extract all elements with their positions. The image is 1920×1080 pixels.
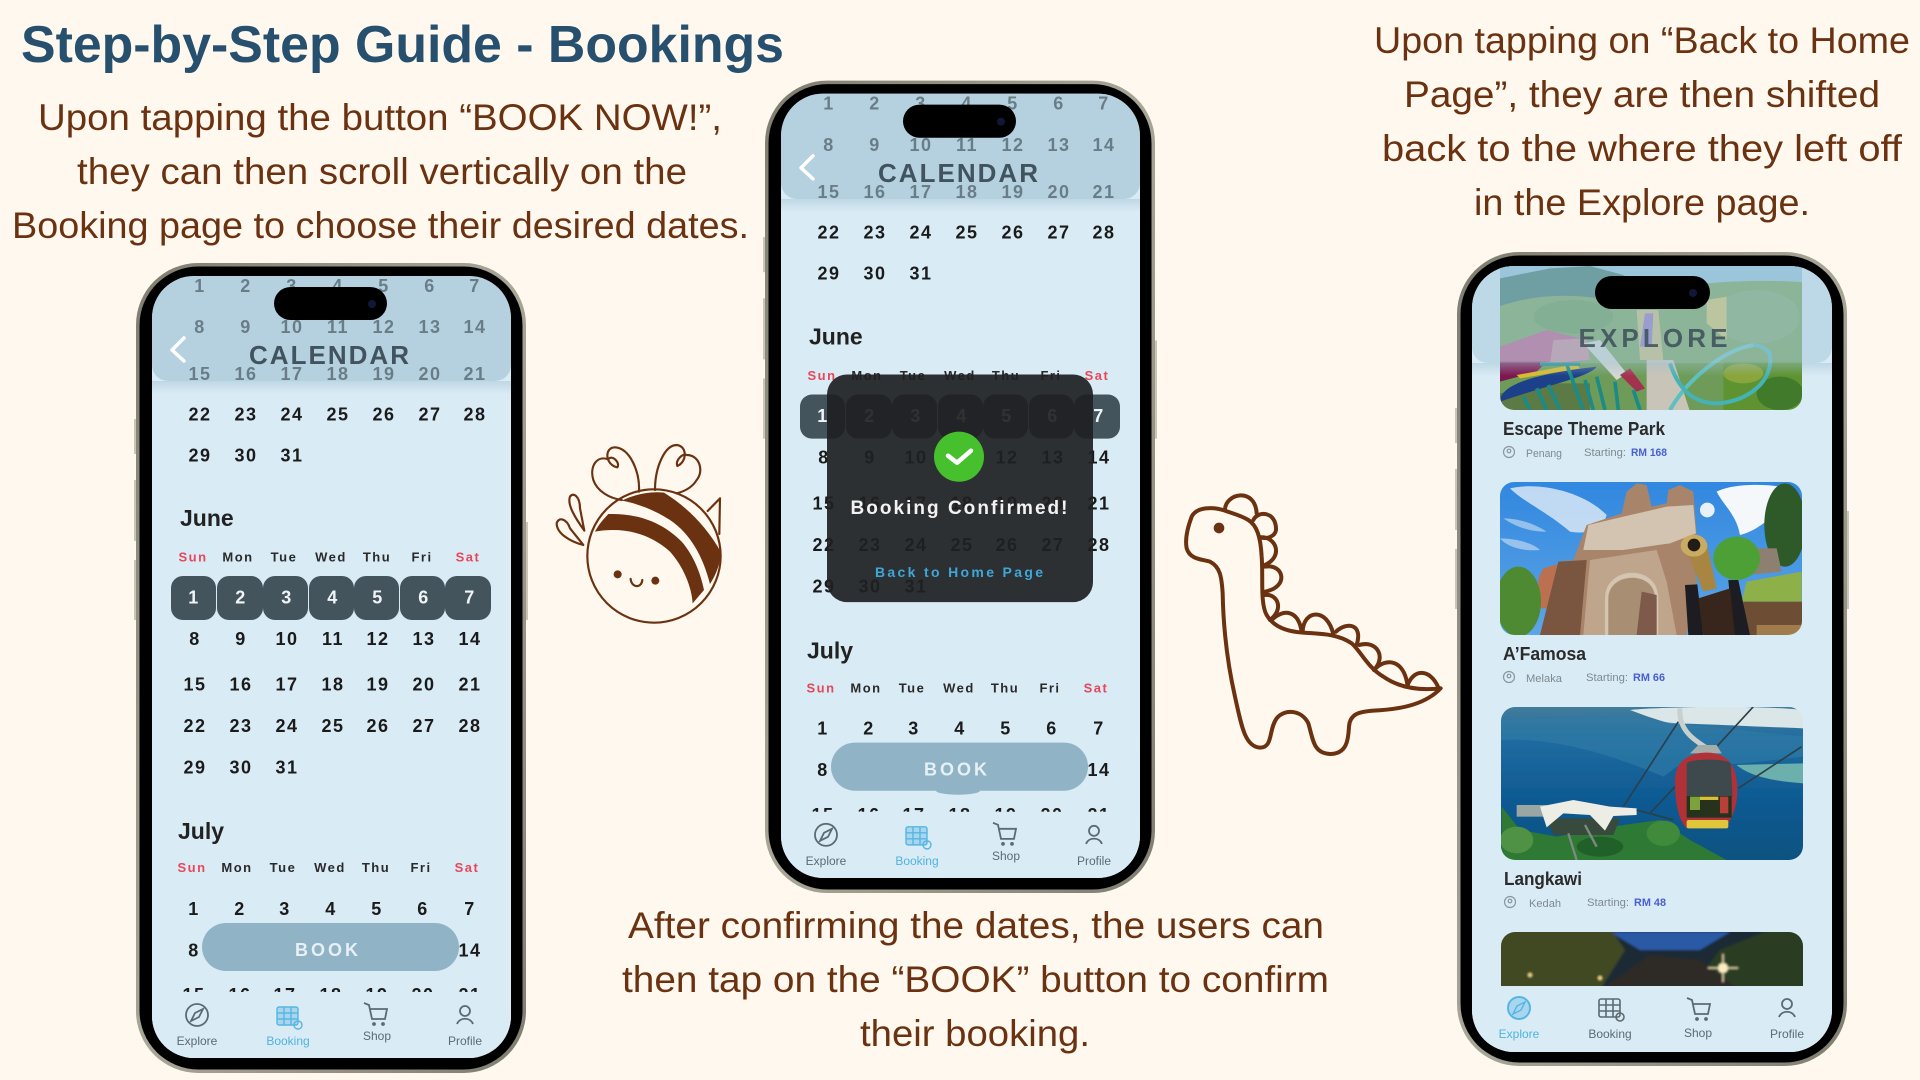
bottom navigation bbox=[152, 992, 511, 1058]
June calendar: 12 bbox=[366, 629, 390, 649]
May dates: 14 bbox=[1092, 135, 1116, 155]
May dates: 22 bbox=[817, 223, 841, 243]
June calendar: June bbox=[809, 323, 863, 349]
May dates: 18 bbox=[955, 182, 979, 202]
May dates: 6 bbox=[1053, 94, 1065, 114]
text block: step two bbox=[622, 905, 1329, 1054]
June calendar: 26 bbox=[995, 535, 1019, 555]
May dates: 23 bbox=[234, 404, 258, 424]
July calendar: Tue bbox=[899, 680, 925, 695]
icon: booking bbox=[277, 1007, 302, 1029]
June calendar: 23 bbox=[858, 535, 882, 555]
June calendar: 6 bbox=[1047, 406, 1059, 426]
June calendar: June bbox=[180, 505, 234, 531]
June calendar: 27 bbox=[412, 716, 436, 736]
May dates: 16 bbox=[863, 182, 887, 202]
icon: explore bbox=[186, 1004, 208, 1026]
June calendar: 2 bbox=[864, 406, 876, 426]
June calendar: 12 bbox=[995, 448, 1019, 468]
July calendar: 20 bbox=[1040, 805, 1064, 825]
June calendar: 23 bbox=[229, 716, 253, 736]
place: Langkawi bbox=[1504, 869, 1666, 910]
icon: pin bbox=[1504, 896, 1516, 908]
May dates: 30 bbox=[234, 446, 258, 466]
icon: green check bbox=[934, 432, 984, 482]
July calendar: Fri bbox=[410, 860, 432, 875]
June calendar: 9 bbox=[235, 629, 247, 649]
June calendar: Fri bbox=[411, 550, 433, 564]
icon: explore bbox=[815, 824, 837, 846]
July calendar: 14 bbox=[1087, 760, 1111, 780]
confirmation popup: Booking Confirmed! bbox=[850, 498, 1068, 519]
icon: shop bbox=[364, 1003, 387, 1025]
July calendar: 10 bbox=[273, 940, 297, 960]
June calendar: Thu bbox=[992, 368, 1020, 383]
July calendar: 9 bbox=[234, 940, 246, 960]
July calendar: Thu bbox=[991, 680, 1019, 695]
July calendar: 18 bbox=[948, 805, 972, 825]
place: Escape Theme Park: Penang bbox=[1526, 448, 1562, 460]
header bar bbox=[781, 88, 1140, 212]
May dates: 28 bbox=[463, 404, 487, 424]
June calendar: 6 bbox=[418, 588, 430, 608]
June calendar: 3 bbox=[281, 588, 293, 608]
July calendar: July bbox=[807, 637, 853, 663]
June calendar: Fri bbox=[1040, 368, 1062, 383]
June calendar: 14 bbox=[458, 629, 482, 649]
June calendar: Sat bbox=[456, 550, 480, 564]
May dates: 3 bbox=[915, 94, 927, 114]
June calendar: 17 bbox=[904, 493, 928, 513]
June calendar: Sat bbox=[1085, 368, 1109, 383]
July calendar: Fri bbox=[1039, 680, 1061, 695]
July calendar: 15 bbox=[811, 805, 835, 825]
June calendar: 11 bbox=[951, 448, 973, 468]
dynamic island bbox=[903, 105, 1016, 138]
May dates bbox=[817, 94, 1116, 284]
May dates: 20 bbox=[418, 364, 442, 384]
May dates: 12 bbox=[1001, 135, 1025, 155]
May dates: 11 bbox=[327, 317, 349, 337]
bottom navigation: Profile bbox=[1077, 854, 1111, 868]
place: Langkawi: Kedah bbox=[1529, 898, 1561, 910]
June calendar: 25 bbox=[321, 716, 345, 736]
text block: step three: Upon tapping on “Back to Home bbox=[1374, 20, 1910, 61]
May dates: 24 bbox=[909, 223, 933, 243]
July calendar: 3 bbox=[908, 719, 920, 739]
June calendar: 19 bbox=[995, 493, 1019, 513]
bottom navigation: Profile bbox=[448, 1034, 482, 1048]
phone frame bbox=[134, 263, 528, 1073]
May dates: 29 bbox=[817, 264, 841, 284]
June calendar: 21 bbox=[458, 674, 482, 694]
icon: booking bbox=[906, 827, 931, 849]
June calendar: 20 bbox=[412, 674, 436, 694]
bottom navigation: Shop bbox=[992, 849, 1020, 863]
July calendar: 4 bbox=[954, 719, 966, 739]
June calendar: 29 bbox=[183, 758, 207, 778]
June calendar: 20 bbox=[1041, 493, 1065, 513]
place: A'Famosa: A’Famosa bbox=[1503, 644, 1587, 664]
July calendar: 1 bbox=[188, 899, 200, 919]
July calendar: 6 bbox=[1046, 719, 1058, 739]
June calendar: 29 bbox=[812, 577, 836, 597]
place: Langkawi: Langkawi bbox=[1504, 869, 1582, 889]
May dates: 16 bbox=[234, 364, 258, 384]
bottom navigation: Profile bbox=[1770, 1027, 1804, 1041]
photo: A'Famosa bbox=[1500, 482, 1802, 635]
June calendar: 25 bbox=[950, 535, 974, 555]
June calendar: 24 bbox=[904, 535, 928, 555]
May dates: 12 bbox=[372, 317, 396, 337]
June calendar: Tue bbox=[900, 368, 926, 383]
May dates: 19 bbox=[1001, 182, 1025, 202]
July calendar: 3 bbox=[279, 899, 291, 919]
June calendar: 28 bbox=[1087, 535, 1111, 555]
May dates: 14 bbox=[463, 317, 487, 337]
July calendar: Sun bbox=[177, 860, 207, 875]
July calendar: Thu bbox=[362, 860, 390, 875]
June calendar: 1 bbox=[188, 588, 200, 608]
May dates: 31 bbox=[909, 264, 933, 284]
May dates: 21 bbox=[463, 364, 487, 384]
June calendar: 13 bbox=[412, 629, 436, 649]
confirmation popup bbox=[827, 374, 1093, 602]
June calendar: 26 bbox=[366, 716, 390, 736]
May dates: 1 bbox=[194, 276, 206, 296]
text block: step one: Booking page to choose their desired dates. bbox=[12, 205, 749, 246]
July calendar: 19 bbox=[994, 805, 1018, 825]
icon: profile bbox=[1086, 826, 1102, 844]
bottom navigation bbox=[1472, 986, 1832, 1052]
May dates: 29 bbox=[188, 446, 212, 466]
June calendar: 16 bbox=[229, 674, 253, 694]
May dates: 1 bbox=[823, 94, 835, 114]
May dates: 25 bbox=[326, 404, 350, 424]
May dates: 9 bbox=[869, 135, 881, 155]
June calendar: 15 bbox=[183, 674, 207, 694]
June calendar: 18 bbox=[950, 493, 974, 513]
May dates: 8 bbox=[194, 317, 206, 337]
May dates: 7 bbox=[1098, 94, 1110, 114]
June calendar: 24 bbox=[275, 716, 299, 736]
icon: shop bbox=[1687, 998, 1710, 1020]
July calendar: 8 bbox=[817, 760, 829, 780]
place: Escape Theme Park: RM 168 bbox=[1631, 447, 1667, 459]
May dates: 15 bbox=[817, 182, 841, 202]
June calendar: 27 bbox=[1041, 535, 1065, 555]
July calendar: July bbox=[178, 818, 224, 844]
phone frame bbox=[1455, 252, 1849, 1066]
May dates: 23 bbox=[863, 223, 887, 243]
July calendar: 16 bbox=[857, 805, 881, 825]
July calendar: Tue bbox=[270, 860, 296, 875]
phone: booking confirmed bbox=[763, 81, 1157, 893]
photo: resort at night bbox=[1501, 932, 1803, 986]
June calendar: 22 bbox=[812, 535, 836, 555]
May dates: 30 bbox=[863, 264, 887, 284]
July calendar: 18 bbox=[319, 985, 343, 1005]
header bar: CALENDAR bbox=[249, 340, 409, 370]
book button: BOOK bbox=[924, 760, 990, 780]
July calendar bbox=[806, 637, 1111, 825]
photo: Langkawi bbox=[1501, 707, 1803, 860]
May dates: 18 bbox=[326, 364, 350, 384]
June calendar: 7 bbox=[1093, 406, 1105, 426]
May dates: 10 bbox=[909, 135, 933, 155]
July calendar: Sun bbox=[806, 680, 836, 695]
July calendar: 10 bbox=[902, 760, 926, 780]
July calendar: Wed bbox=[314, 860, 346, 875]
place: Langkawi: Starting: bbox=[1587, 897, 1629, 909]
June calendar: 15 bbox=[812, 493, 836, 513]
June calendar: 16 bbox=[858, 493, 882, 513]
text block: step two: their booking. bbox=[860, 1013, 1090, 1054]
bottom navigation: Booking bbox=[266, 1034, 310, 1048]
text block: step two: After confirming the dates, the users can bbox=[628, 905, 1324, 946]
May dates: 24 bbox=[280, 404, 304, 424]
July calendar: 21 bbox=[458, 985, 482, 1005]
book button bbox=[831, 743, 1088, 795]
May dates: 5 bbox=[378, 276, 390, 296]
July calendar: 11 bbox=[320, 940, 342, 960]
June calendar: 5 bbox=[1001, 406, 1013, 426]
May dates: 27 bbox=[418, 404, 442, 424]
text block: step one: they can then scroll vertically on the bbox=[77, 151, 687, 192]
June calendar: 19 bbox=[366, 674, 390, 694]
July calendar: Wed bbox=[943, 680, 975, 695]
phone: booking calendar bbox=[134, 263, 528, 1073]
July calendar: Sat bbox=[455, 860, 479, 875]
bottom navigation: Explore bbox=[177, 1034, 218, 1048]
July calendar: Mon bbox=[850, 680, 882, 695]
July calendar: 17 bbox=[273, 985, 297, 1005]
May dates: 17 bbox=[280, 364, 304, 384]
icon: pin bbox=[1504, 446, 1514, 458]
screen content bbox=[1460, 260, 1840, 1061]
icon: pin bbox=[1504, 672, 1514, 682]
June calendar bbox=[800, 323, 1120, 597]
July calendar: 15 bbox=[182, 985, 206, 1005]
July calendar: 4 bbox=[325, 899, 337, 919]
book button bbox=[202, 923, 459, 971]
text block: step three: in the Explore page. bbox=[1474, 182, 1810, 223]
June calendar: 31 bbox=[275, 758, 299, 778]
July calendar: 7 bbox=[1093, 719, 1105, 739]
June calendar: 13 bbox=[1041, 448, 1065, 468]
May dates: 8 bbox=[823, 135, 835, 155]
June calendar: Tue bbox=[271, 550, 297, 564]
icon: explore bbox=[1508, 997, 1530, 1019]
dynamic island bbox=[1595, 276, 1710, 309]
June calendar bbox=[171, 505, 491, 778]
screen content bbox=[769, 88, 1149, 882]
May dates: 2 bbox=[869, 94, 881, 114]
June calendar: 10 bbox=[275, 629, 299, 649]
icon: dinosaur bbox=[1186, 495, 1441, 754]
header bar: EXPLORE bbox=[1578, 323, 1728, 353]
July calendar: 14 bbox=[458, 940, 482, 960]
June calendar: 5 bbox=[372, 588, 384, 608]
July calendar: 6 bbox=[417, 899, 429, 919]
text block: step one: Upon tapping the button “BOOK NOW!”, bbox=[38, 97, 722, 138]
June calendar: 18 bbox=[321, 674, 345, 694]
text block: step one bbox=[12, 97, 749, 246]
dynamic island bbox=[274, 287, 387, 320]
text block: step three bbox=[1374, 20, 1910, 223]
May dates: 25 bbox=[955, 223, 979, 243]
place: Escape Theme Park: Starting: bbox=[1584, 447, 1626, 459]
bottom navigation: Explore bbox=[806, 854, 847, 868]
June calendar: 11 bbox=[322, 629, 344, 649]
June calendar: Mon bbox=[222, 550, 254, 564]
May dates: 20 bbox=[1047, 182, 1071, 202]
text block: step three: Page”, they are then shifted bbox=[1404, 74, 1880, 115]
June calendar: 9 bbox=[864, 448, 876, 468]
July calendar: 17 bbox=[902, 805, 926, 825]
photo: Escape Theme Park bbox=[1500, 266, 1802, 410]
May dates: 6 bbox=[424, 276, 436, 296]
bottom navigation: Booking bbox=[1588, 1027, 1632, 1041]
icon: bee bbox=[557, 445, 721, 623]
place: A'Famosa bbox=[1502, 647, 1665, 684]
July calendar: 1 bbox=[817, 719, 829, 739]
July calendar: 13 bbox=[1040, 760, 1064, 780]
July calendar: 20 bbox=[411, 985, 435, 1005]
screen content bbox=[140, 270, 520, 1062]
title: Step-by-Step Guide - Bookings bbox=[21, 16, 784, 74]
July calendar: 13 bbox=[411, 940, 435, 960]
July calendar bbox=[177, 818, 482, 1005]
July calendar: 16 bbox=[228, 985, 252, 1005]
May dates: 9 bbox=[240, 317, 252, 337]
June calendar: 22 bbox=[183, 716, 207, 736]
place: A'Famosa: Melaka bbox=[1526, 673, 1563, 685]
June calendar: 14 bbox=[1087, 448, 1111, 468]
header bar: CALENDAR bbox=[878, 158, 1038, 188]
May dates: 10 bbox=[280, 317, 304, 337]
July calendar: 9 bbox=[863, 760, 875, 780]
place: A'Famosa: RM 66 bbox=[1633, 672, 1665, 684]
May dates: 13 bbox=[418, 317, 442, 337]
June calendar: Sun bbox=[178, 550, 208, 564]
bottom navigation: Shop bbox=[1684, 1026, 1712, 1040]
May dates: 26 bbox=[1001, 223, 1025, 243]
May dates: 13 bbox=[1047, 135, 1071, 155]
June calendar: Thu bbox=[363, 550, 391, 564]
June calendar: Sun bbox=[807, 368, 837, 383]
June calendar: 4 bbox=[327, 588, 339, 608]
June calendar: 21 bbox=[1087, 493, 1111, 513]
text block: step three: back to the where they left off bbox=[1382, 128, 1903, 169]
May dates: 2 bbox=[240, 276, 252, 296]
bottom navigation: Explore bbox=[1499, 1027, 1540, 1041]
July calendar: 11 bbox=[949, 760, 971, 780]
May dates: 7 bbox=[469, 276, 481, 296]
July calendar: Sat bbox=[1084, 680, 1108, 695]
July calendar: Mon bbox=[221, 860, 253, 875]
June calendar: 8 bbox=[818, 448, 830, 468]
July calendar: 5 bbox=[1000, 719, 1012, 739]
book button: BOOK bbox=[295, 940, 361, 960]
June calendar: 28 bbox=[458, 716, 482, 736]
June calendar: 1 bbox=[817, 406, 829, 426]
June calendar: 4 bbox=[956, 406, 968, 426]
June calendar: 31 bbox=[904, 577, 928, 597]
May dates: 22 bbox=[188, 404, 212, 424]
place: A'Famosa: Starting: bbox=[1586, 672, 1628, 684]
place: Escape Theme Park bbox=[1503, 419, 1667, 460]
June calendar: 2 bbox=[235, 588, 247, 608]
icon: shop bbox=[993, 823, 1016, 845]
May dates: 28 bbox=[1092, 223, 1116, 243]
May dates: 26 bbox=[372, 404, 396, 424]
June calendar: Wed bbox=[315, 550, 347, 564]
June calendar: 10 bbox=[904, 448, 928, 468]
June calendar: 17 bbox=[275, 674, 299, 694]
May dates: 31 bbox=[280, 446, 304, 466]
May dates: 4 bbox=[332, 276, 344, 296]
July calendar: 12 bbox=[365, 940, 389, 960]
May dates: 3 bbox=[286, 276, 298, 296]
May dates: 4 bbox=[961, 94, 973, 114]
June calendar: 30 bbox=[229, 758, 253, 778]
bottom navigation bbox=[781, 812, 1140, 878]
June calendar: 30 bbox=[858, 577, 882, 597]
confirmation popup: Back to Home Page bbox=[875, 564, 1043, 580]
July calendar: 12 bbox=[994, 760, 1018, 780]
icon: booking bbox=[1599, 999, 1624, 1021]
icon: profile bbox=[457, 1006, 473, 1024]
June calendar: Mon bbox=[851, 368, 883, 383]
header bar bbox=[152, 270, 511, 394]
June calendar: 3 bbox=[910, 406, 922, 426]
phone frame bbox=[763, 81, 1157, 893]
July calendar: 2 bbox=[234, 899, 246, 919]
place: Langkawi: RM 48 bbox=[1634, 897, 1666, 909]
May dates: 19 bbox=[372, 364, 396, 384]
place: Escape Theme Park: Escape Theme Park bbox=[1503, 419, 1666, 439]
phone: explore bbox=[1455, 252, 1849, 1066]
May dates: 11 bbox=[956, 135, 978, 155]
May dates: 21 bbox=[1092, 182, 1116, 202]
bottom navigation: Shop bbox=[363, 1029, 391, 1043]
text block: step two: then tap on the “BOOK” button to confirm bbox=[622, 959, 1329, 1000]
May dates: 17 bbox=[909, 182, 933, 202]
header bar bbox=[1472, 260, 1832, 376]
June calendar: 7 bbox=[464, 588, 476, 608]
July calendar: 21 bbox=[1087, 805, 1111, 825]
July calendar: 2 bbox=[863, 719, 875, 739]
July calendar: 5 bbox=[371, 899, 383, 919]
July calendar: 7 bbox=[464, 899, 476, 919]
icon: profile bbox=[1779, 999, 1795, 1017]
May dates: 5 bbox=[1007, 94, 1019, 114]
June calendar: 8 bbox=[189, 629, 201, 649]
May dates bbox=[188, 276, 487, 466]
June calendar: Wed bbox=[944, 368, 976, 383]
May dates: 27 bbox=[1047, 223, 1071, 243]
bottom navigation: Booking bbox=[895, 854, 939, 868]
July calendar: 19 bbox=[365, 985, 389, 1005]
July calendar: 8 bbox=[188, 940, 200, 960]
May dates: 15 bbox=[188, 364, 212, 384]
